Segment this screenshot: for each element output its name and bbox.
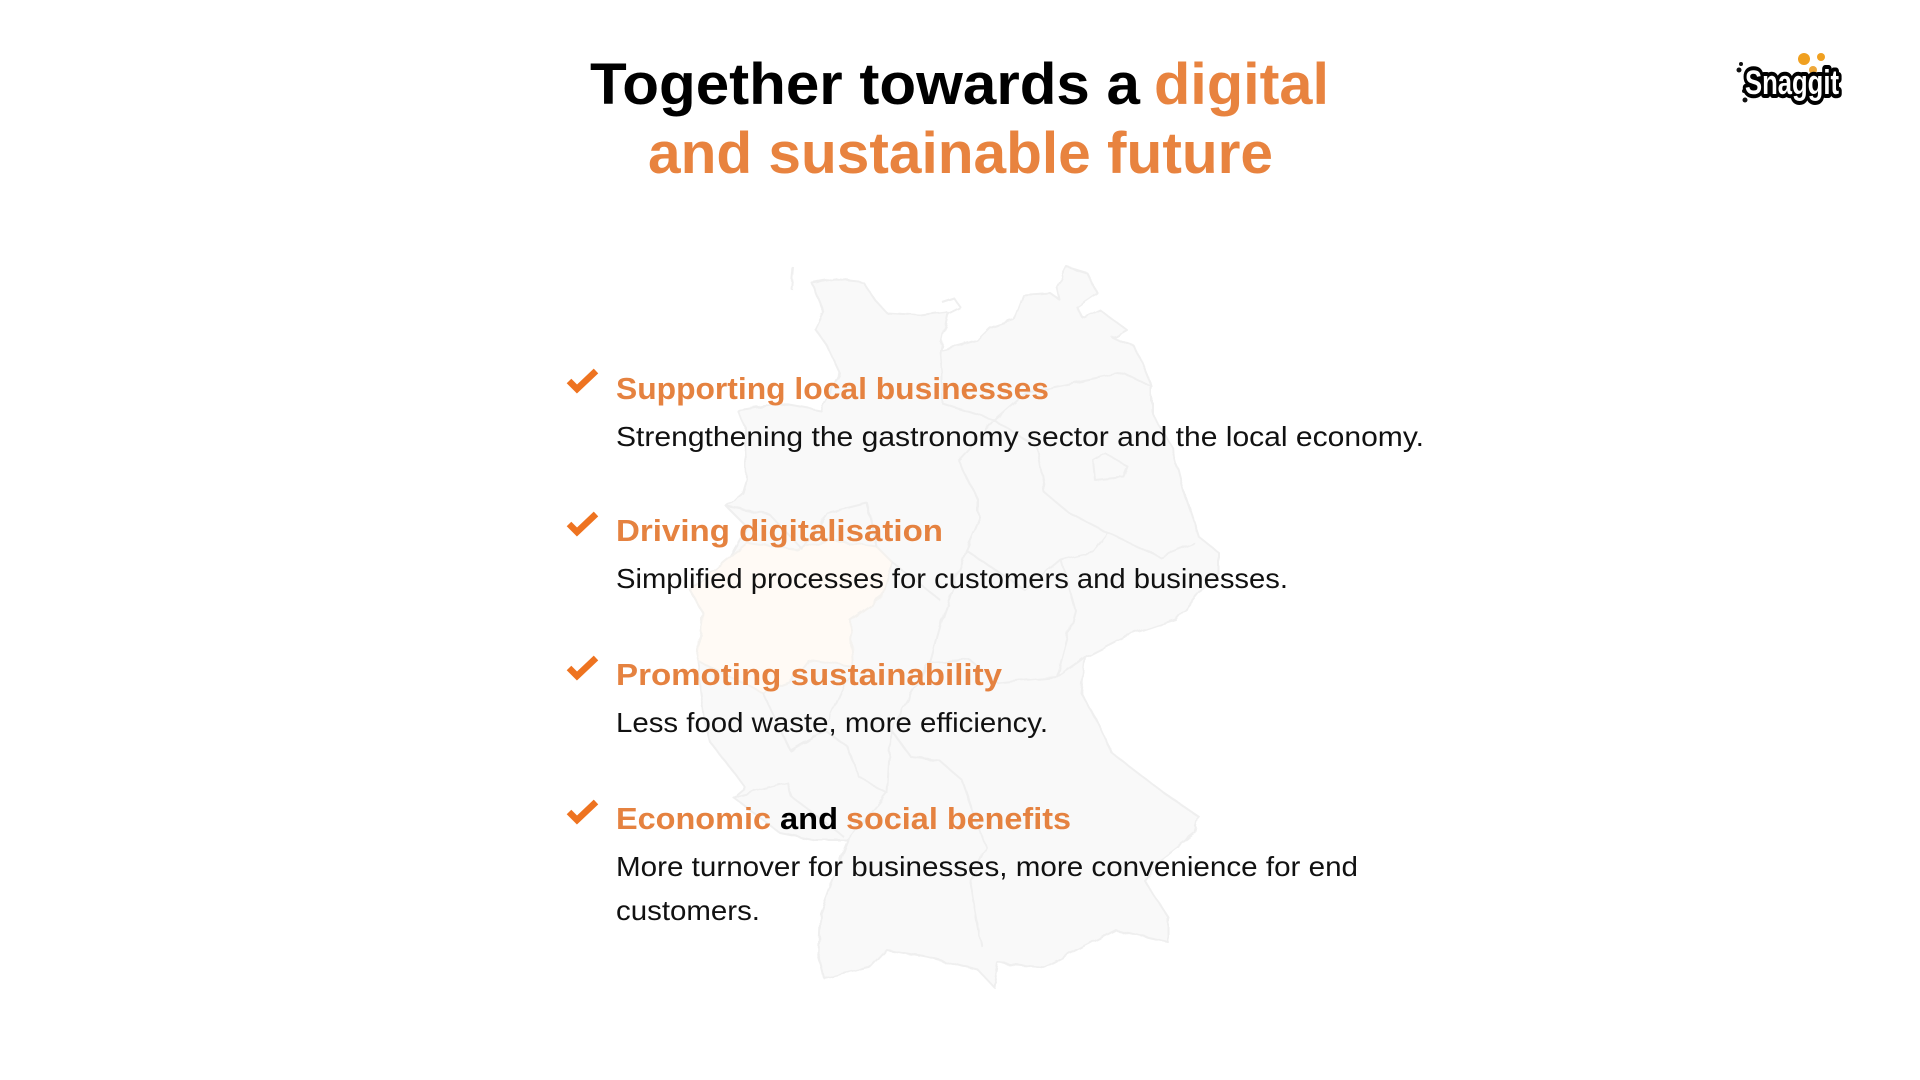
list item: promoting sustainability [569,657,1048,738]
list item: economic and social benefits: social benefits [846,801,1071,836]
title: digital [1154,52,1329,117]
region borders [727,350,1195,947]
list item: supporting local businesses [569,371,1424,452]
list item: economic and social benefits [569,801,1358,926]
list item: economic and social benefits: More turnover for businesses, more convenience for end [616,851,1358,882]
list item: driving digitalisation: Simplified processes for customers and businesses. [616,563,1288,594]
list item: promoting sustainability: Less food waste, more efficiency. [616,707,1048,738]
background map of Germany [690,267,1219,987]
title [590,52,1329,186]
logo: Snaggit: Snaggit [1745,64,1839,102]
list item: economic and social benefits: customers. [616,895,760,926]
list item: promoting sustainability: Promoting sustainability [616,657,1003,692]
list item: supporting local businesses: Supporting local businesses [616,371,1049,406]
icon: check mark [569,658,596,676]
list item: economic and social benefits: and [780,801,838,836]
title: Together towards a [590,52,1141,117]
title: and sustainable future [648,121,1273,186]
logo: Snaggit [1736,53,1839,102]
icon: check mark [569,514,596,532]
North Rhine-Westphalia tint [690,540,893,693]
list item: driving digitalisation: Driving digitalisation [616,513,943,548]
list item: driving digitalisation [569,513,1288,594]
list item: economic and social benefits: Economic [616,801,771,836]
icon: check mark [569,371,596,389]
icon: check mark [569,802,596,820]
list item: supporting local businesses: Strengthening the gastronomy sector and the local economy. [616,421,1424,452]
